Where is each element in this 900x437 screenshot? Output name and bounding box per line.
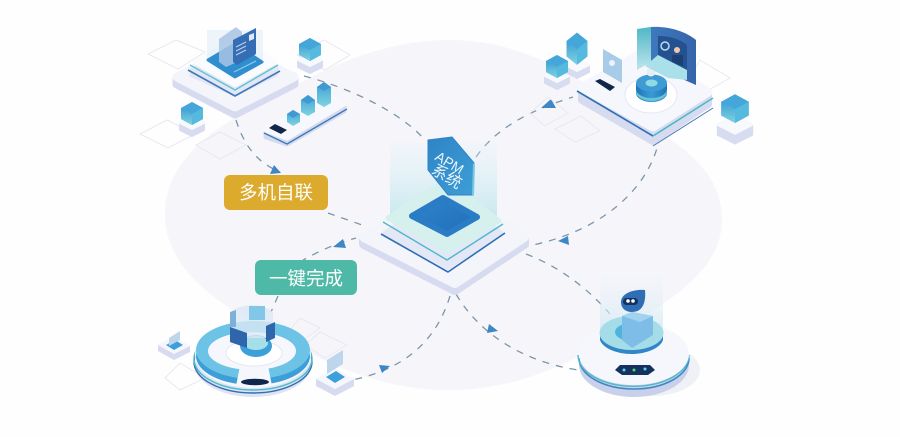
status chip — [241, 379, 269, 385]
dashed connectors — [236, 76, 660, 380]
label: 一键完成: 一键完成 — [269, 268, 343, 289]
label: 一键完成 — [255, 260, 357, 295]
blue chip — [412, 198, 477, 234]
platform: bar chart — [264, 82, 347, 144]
status lights — [615, 365, 655, 375]
status chip — [269, 124, 287, 134]
platform: top-right face recognition — [577, 27, 713, 146]
cube: top-right right — [718, 94, 752, 143]
small device: ring right — [316, 350, 354, 396]
badge: APM: APM — [432, 148, 467, 177]
cube body — [622, 312, 653, 348]
icon: robot head — [621, 290, 645, 312]
platform: top-left document — [177, 27, 294, 114]
label: 多机自联: 多机自联 — [239, 182, 313, 203]
outline tiles — [140, 40, 730, 390]
label: 多机自联 — [224, 175, 328, 210]
cube: top-left upper — [298, 38, 322, 73]
glass cylinder — [600, 273, 663, 335]
icon: upright card — [603, 49, 622, 83]
central APM platform — [364, 137, 524, 290]
disc and cylinder — [625, 68, 677, 113]
platform: bottom-left ring — [194, 305, 312, 397]
bars — [287, 82, 331, 126]
central cylinder — [226, 305, 282, 366]
platform: bottom-right robot — [578, 273, 700, 397]
arrowheads — [270, 99, 569, 373]
blue base — [600, 333, 663, 354]
cube: top-left lower — [180, 102, 204, 136]
badge: APM — [428, 137, 475, 195]
badge: APM: 系统 — [428, 161, 465, 193]
cubes: top-right left pair — [545, 33, 589, 89]
segmented ring — [196, 321, 310, 386]
icon: document screen — [207, 27, 263, 77]
glass panel — [390, 143, 497, 218]
icon: curved screen — [637, 27, 696, 85]
small device: ring left — [158, 331, 190, 360]
status chip — [595, 79, 615, 91]
background blob — [165, 40, 722, 390]
